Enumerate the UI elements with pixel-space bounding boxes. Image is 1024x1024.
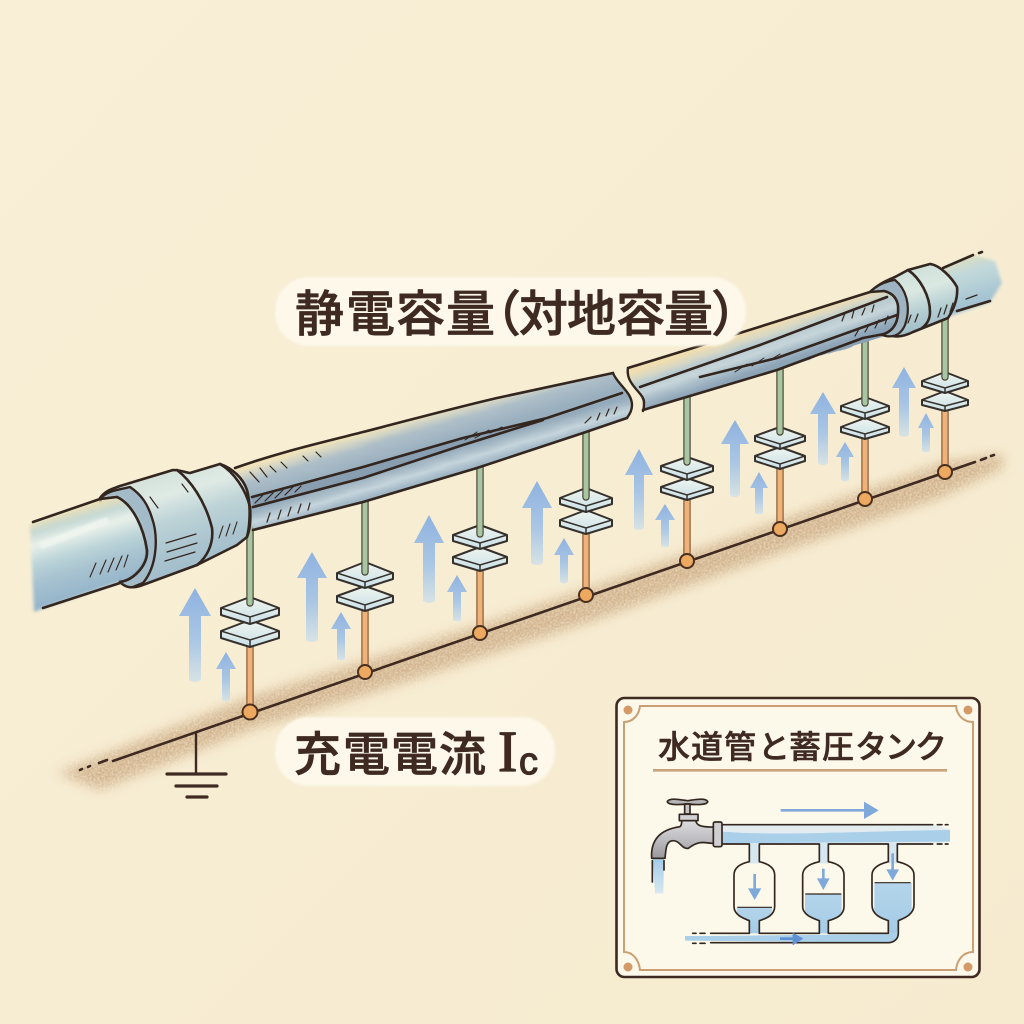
leg 1 [221, 525, 279, 720]
heading: charging current label [275, 717, 555, 786]
capacitor legs [221, 316, 968, 720]
left pipe highlight [40, 520, 108, 546]
power cable [30, 252, 1002, 612]
right cable and coupling lines [628, 252, 990, 410]
cable outer and inner lines [235, 368, 644, 530]
ground shadow band [57, 454, 1003, 790]
heading: charging current label: 充電電流 [294, 728, 486, 781]
inset rule [653, 769, 947, 772]
leg 5 [661, 392, 713, 568]
inset title: 水道管と蓄圧タンク [658, 729, 947, 765]
water diagram [652, 799, 950, 945]
decorative frame [624, 706, 973, 970]
right coupling body [870, 264, 957, 336]
heading: charging current label: c [519, 741, 538, 783]
upper pipe water [722, 825, 950, 844]
heading: capacitance label: 静電容量（対地容量） [295, 288, 760, 342]
faucet [652, 799, 722, 882]
right pipe section [940, 255, 1002, 316]
leg 7 [841, 332, 889, 506]
right coupling ring [870, 280, 908, 336]
heading: charging current label: I [498, 719, 517, 784]
charging current arrows [179, 367, 934, 702]
left pipe and coupling lines [33, 464, 250, 608]
panel: water analogy inset [616, 698, 980, 977]
tanks water [749, 843, 897, 863]
main cable right part [628, 292, 895, 410]
left coupling ring [100, 487, 156, 587]
leg 2 [337, 495, 393, 679]
cable wedge shading [252, 419, 545, 507]
cable end inside right coupling [855, 291, 898, 340]
spout water [653, 858, 664, 893]
left coupling body [100, 464, 250, 587]
left pipe section [30, 497, 147, 612]
main cable left part [235, 373, 632, 530]
pipe lines [693, 825, 948, 943]
ground line with earth symbol [80, 455, 994, 797]
flow arrows [755, 810, 893, 939]
leg 4 [560, 426, 612, 602]
leg 8 [922, 316, 968, 479]
leg 3 [453, 462, 507, 640]
leg 6 [755, 364, 805, 536]
